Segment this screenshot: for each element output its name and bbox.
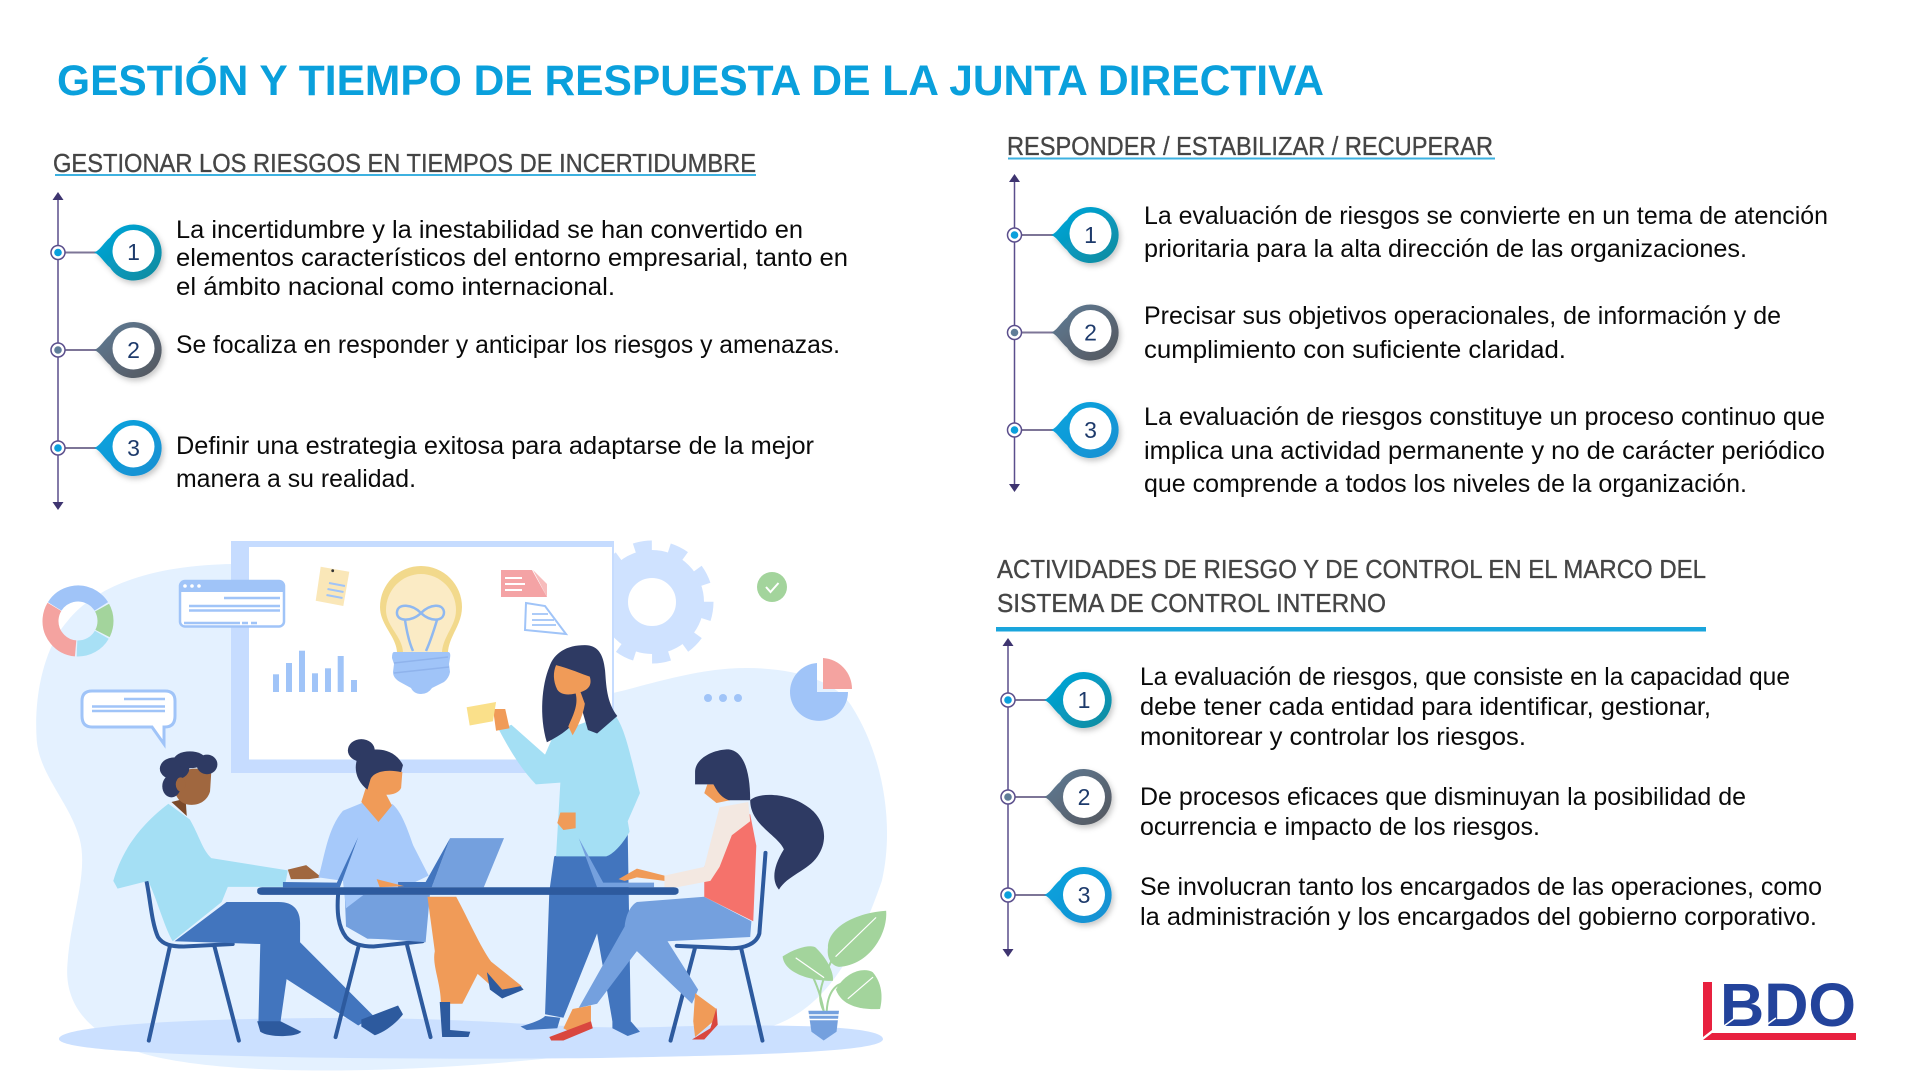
heading: responder: RESPONDER / ESTABILIZAR / RECUPERAR <box>1007 131 1493 161</box>
text 1: La evaluación de riesgos, que consiste en la capacidad que <box>1140 663 1790 691</box>
text 3: La evaluación de riesgos constituye un proceso continuo que <box>1144 403 1825 431</box>
text 3 <box>1140 873 1822 931</box>
panel: responder estabilizar recuperar <box>1007 131 1828 498</box>
marker 1: 1 <box>1084 222 1097 248</box>
icon: light bulb <box>380 566 462 694</box>
heading: actividades: SISTEMA DE CONTROL INTERNO <box>997 588 1386 618</box>
text 2: De procesos eficaces que disminuyan la posibilidad de <box>1140 783 1746 811</box>
text 3: que comprende a todos los niveles de la organización. <box>1144 470 1747 498</box>
text 1: monitorear y controlar los riesgos. <box>1140 723 1526 751</box>
heading: actividades <box>996 554 1706 632</box>
marker 2: 2 <box>127 337 140 363</box>
heading: actividades: ACTIVIDADES DE RIESGO Y DE CONTROL EN EL MARCO DEL <box>997 554 1706 584</box>
panel: gestionar los riesgos <box>51 148 848 510</box>
marker 1 <box>1001 672 1112 728</box>
marker 3: 3 <box>127 435 140 461</box>
pie chart <box>790 658 852 721</box>
text 1: La evaluación de riesgos se convierte en un tema de atención <box>1144 202 1828 230</box>
text 2: Precisar sus objetivos operacionales, de información y de <box>1144 302 1781 330</box>
browser window <box>180 581 284 626</box>
heading: gestionar: GESTIONAR LOS RIESGOS EN TIEMPOS DE INCERTIDUMBRE <box>53 148 756 178</box>
marker 3 <box>1001 867 1112 923</box>
text 3 <box>176 432 814 493</box>
icon: check mark <box>757 572 787 602</box>
background blob <box>36 564 887 1070</box>
text 1 <box>1144 202 1828 263</box>
illustration: team meeting <box>36 541 887 1070</box>
gear <box>596 546 708 658</box>
text 1: La incertidumbre y la inestabilidad se han convertido en <box>176 216 803 244</box>
text 1: prioritaria para la alta dirección de las organizaciones. <box>1144 235 1747 263</box>
text 3: Definir una estrategia exitosa para adaptarse de la mejor <box>176 432 814 460</box>
sticky note <box>316 567 349 606</box>
marker 2: 2 <box>1078 784 1090 810</box>
person: woman standing <box>467 645 640 1036</box>
text 2 <box>1144 302 1781 364</box>
marker 3: 3 <box>1078 882 1090 908</box>
text 2: Se focaliza en responder y anticipar los riesgos y amenazas. <box>176 331 840 359</box>
text 2 <box>1140 783 1746 841</box>
text 2: cumplimiento con suficiente claridad. <box>1144 336 1566 364</box>
marker 1: 1 <box>1078 687 1090 713</box>
marker 3 <box>51 420 162 476</box>
person: woman seated <box>318 739 524 1037</box>
marker 2 <box>1001 769 1112 825</box>
person: man seated <box>113 751 403 1041</box>
text 1 <box>1140 663 1790 751</box>
speech bubble <box>82 691 175 744</box>
marker 1 <box>1008 207 1119 263</box>
text 1 <box>176 216 848 301</box>
panel: actividades de riesgo y de control <box>996 554 1822 957</box>
marker 2: 2 <box>1084 320 1097 346</box>
marker 3: 3 <box>1084 417 1097 443</box>
text 3: manera a su realidad. <box>176 465 416 493</box>
marker 2 <box>1008 304 1119 360</box>
text 3 <box>1144 403 1825 498</box>
timeline arrow <box>1009 174 1020 492</box>
marker 1: 1 <box>127 239 140 265</box>
text 3: la administración y los encargados del gobierno corporativo. <box>1140 903 1817 931</box>
marker 2 <box>51 322 162 378</box>
marker 1 <box>51 224 162 280</box>
text 1: debe tener cada entidad para identificar, gestionar, <box>1140 693 1711 721</box>
timeline arrow <box>1002 638 1014 957</box>
icon: BDO logo: BDO <box>1720 971 1856 1039</box>
marker 3 <box>1008 402 1119 458</box>
bar chart <box>273 651 357 692</box>
title: GESTIÓN Y TIEMPO DE RESPUESTA DE LA JUNTA DIRECTIVA <box>57 56 1324 105</box>
text 1: el ámbito nacional como internacional. <box>176 273 615 301</box>
potted plant <box>783 911 886 1041</box>
pink notes <box>501 570 566 634</box>
donut chart <box>40 583 116 659</box>
timeline arrow <box>52 192 64 510</box>
three dots <box>704 694 742 702</box>
text 1: elementos característicos del entorno empresarial, tanto en <box>176 244 848 272</box>
text 2: ocurrencia e impacto de los riesgos. <box>1140 813 1540 841</box>
ground shadow <box>59 1018 883 1059</box>
people at table <box>113 645 886 1041</box>
text 3: implica una actividad permanente y no de carácter periódico <box>1144 437 1825 465</box>
person: woman right <box>549 749 824 1041</box>
text 3: Se involucran tanto los encargados de las operaciones, como <box>1140 873 1822 901</box>
laptops <box>283 837 654 887</box>
table <box>257 887 679 895</box>
whiteboard <box>231 541 614 773</box>
